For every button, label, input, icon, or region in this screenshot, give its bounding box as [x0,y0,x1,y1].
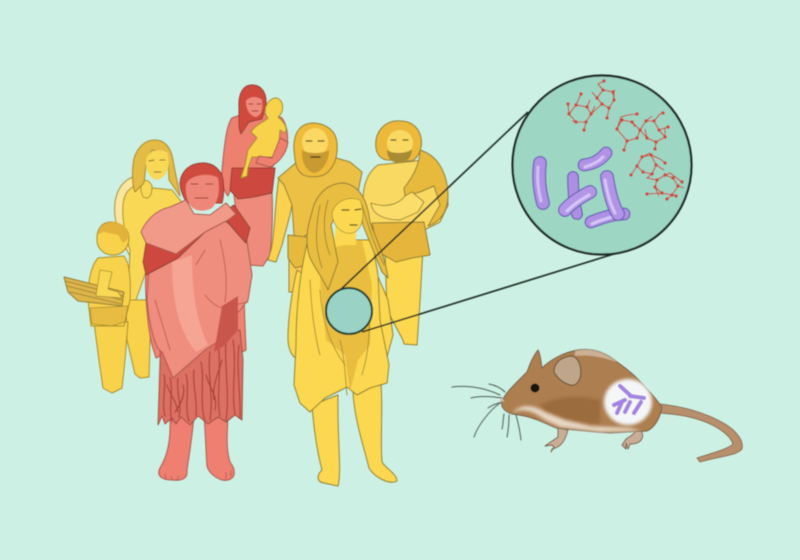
circle background [512,76,692,254]
beard [387,149,412,163]
legs [312,395,340,486]
glycan molecule cluster right [615,111,670,152]
hair and beard [294,123,337,177]
legs [289,245,320,292]
skirt [230,168,275,199]
pointer line: upper [337,112,528,293]
arms [146,255,170,358]
figure: bearded man in fur [268,123,362,292]
carried animal pelt [404,150,448,226]
torso [88,256,130,326]
fur cape [141,200,236,254]
legs [94,322,128,393]
head and hair [97,222,129,255]
toes [165,471,231,480]
curly hair [376,121,421,161]
torso and arms [222,114,288,196]
wavy hair [307,183,388,290]
whiskers [452,384,521,440]
figure: right man with curly hair [363,121,448,345]
eye [530,384,540,392]
arms [288,270,312,358]
figure: yellow woman in front [288,183,397,486]
bacterium 2 [584,153,606,167]
legs [234,192,272,266]
bacterium 4 [565,192,590,211]
forearm over baby [256,138,288,167]
torso and arms [363,160,448,232]
loincloth [90,306,128,326]
mouse [452,350,742,462]
small gut circle on woman [326,288,372,334]
dress shading [320,240,372,392]
hand [141,180,152,198]
head and hair [180,163,224,203]
arm [96,270,122,298]
fur bundle [115,177,150,262]
legs [126,300,153,378]
left arm [268,178,295,262]
face [146,150,169,180]
bundle of sticks [64,277,124,306]
hair and face [239,85,266,134]
figure: large red woman in fur cape [141,163,252,480]
shorts [372,222,430,262]
neck and face [334,222,356,245]
robe folds [172,255,208,352]
dress [294,240,389,412]
bacterium 6 [591,214,624,224]
glycan molecule cluster lower [629,153,684,201]
hide skirt [288,235,318,268]
belly highlight [512,406,642,432]
baby [241,98,286,178]
ear [554,356,581,385]
tail [660,404,742,462]
legs [385,248,423,345]
red collar [143,205,250,275]
front foot [545,428,568,452]
bacterium 5 [605,177,618,214]
nose [500,399,504,403]
bacterium 3 [573,177,577,214]
hind foot [622,428,643,449]
bacteria [538,153,624,224]
top of back highlight [575,350,617,362]
fur tunic [278,158,362,240]
fur shading [540,397,600,425]
arm across body [371,192,424,220]
mini bacteria [614,386,644,413]
figure: blonde woman at back left [115,140,184,378]
hair [132,140,180,196]
figure: child carrying bundle [64,222,130,393]
skirt fringe strands [164,340,240,422]
body and arm [123,186,184,300]
figure: red woman holding yellow baby [222,85,288,266]
glycan molecule cluster top [566,79,616,132]
pointer line: lower [362,253,617,332]
fringed skirt [158,330,243,425]
robe [147,218,252,378]
body [502,350,662,433]
bacterium 1 [538,163,543,203]
legs [159,415,194,480]
magnified gut circle [512,76,692,254]
white patch [604,379,652,425]
